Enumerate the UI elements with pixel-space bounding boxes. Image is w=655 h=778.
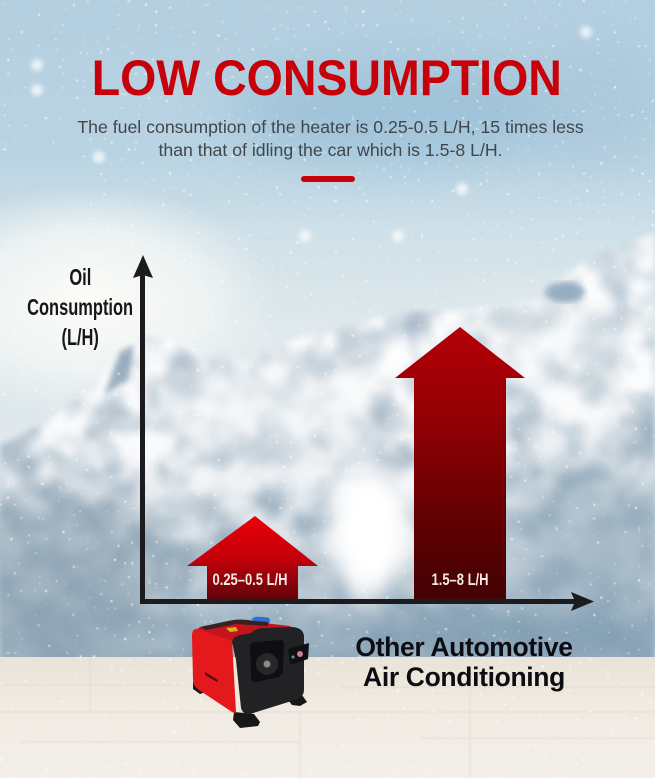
blue cap (252, 617, 270, 625)
description text (77, 117, 584, 160)
small arrow value: 0.25–0.5 L/H (212, 570, 288, 589)
black front (232, 627, 304, 714)
axes arrows (133, 255, 594, 611)
red divider bar (301, 176, 355, 182)
top (196, 622, 296, 644)
tall arrow value: 1.5–8 L/H (432, 570, 488, 589)
title: LOW CONSUMPTION (92, 50, 562, 106)
icon: diesel heater product (192, 616, 309, 728)
tall red arrow: other automotive air conditioning (395, 327, 525, 599)
feet (193, 682, 307, 728)
y-axis label: Oil (69, 264, 91, 290)
red side (192, 629, 236, 713)
small red arrow: heater (187, 516, 318, 599)
x-axis label: Other Automotive (355, 632, 573, 662)
description text: The fuel consumption of the heater is 0.25-0.5 L/H, 15 times less (77, 117, 584, 137)
y-axis label: Consumption (27, 294, 133, 320)
y-axis label (27, 264, 133, 350)
x-axis label (355, 632, 573, 692)
control panel (288, 643, 309, 665)
low-frequency tones (0, 490, 170, 670)
x-axis label: Air Conditioning (363, 662, 565, 692)
description text: than that of idling the car which is 1.5-8 L/H. (158, 140, 503, 160)
y-axis label: (L/H) (61, 324, 99, 350)
vent (250, 640, 284, 682)
